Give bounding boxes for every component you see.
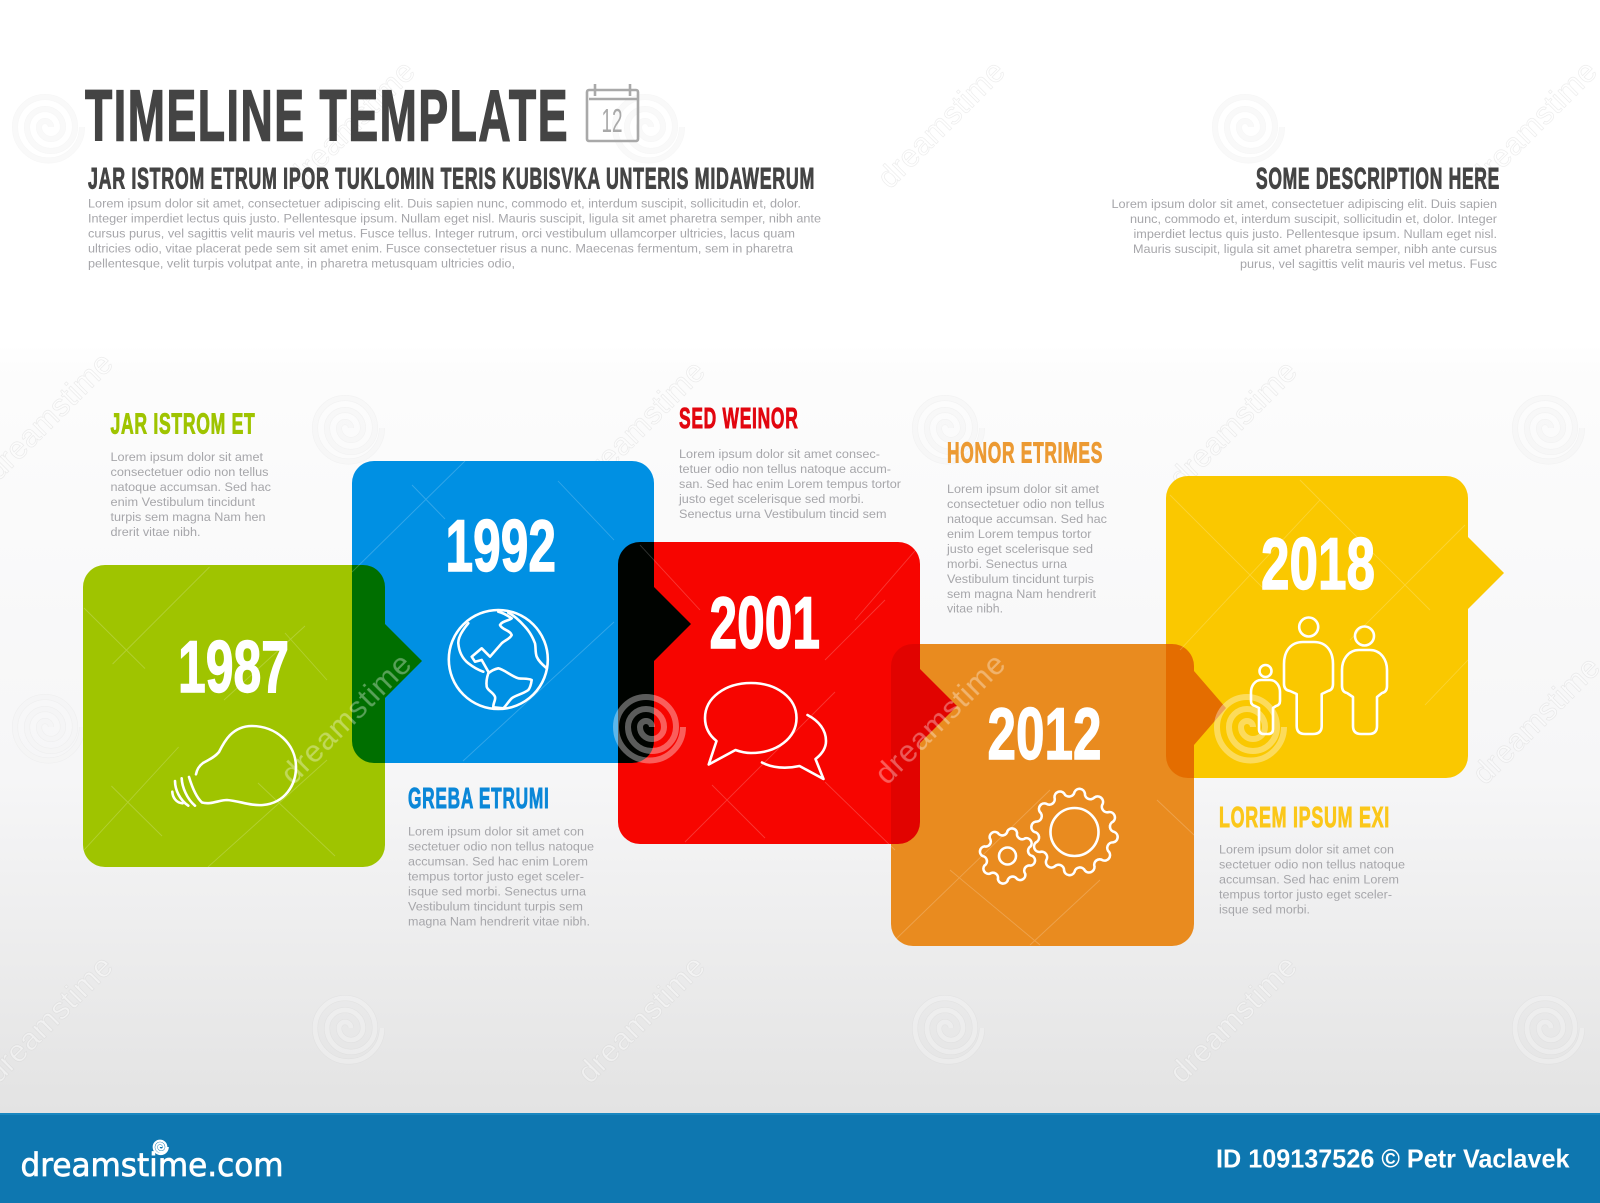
icon: calendar [587,84,638,141]
icon: calendar: 12 [602,102,622,139]
card: 1987 green [83,565,422,867]
icon: family [1251,618,1387,734]
body text: tempus tortor justo eget sceler- [1219,888,1392,902]
section: Sed Weinor [678,403,901,521]
body text: enim Lorem tempus tortor [947,527,1092,541]
heading: LOREM IPSUM EXI [1219,802,1390,834]
year: 1992: 1992 [446,506,556,587]
body text: Lorem ipsum dolor sit amet consec- [679,447,880,461]
body text: justo eget scelerisque sed [946,542,1093,556]
body text: isque sed morbi. Senectus urna [408,884,586,898]
body text: Senectus urna Vestibulum tincid sem [679,507,886,521]
heading: GREBA ETRUMI [408,783,550,815]
body text: sectetuer odio non tellus natoque [1219,858,1405,872]
body text: turpis sem magna Nam hen [110,510,266,524]
background watermark: dreamstime [570,949,712,1090]
section: Lorem Ipsum Exi [1219,802,1405,916]
body text: accumsan. Sed hac enim Lorem [408,854,588,868]
body text [946,482,1107,616]
heading: intro subtitle: JAR ISTROM ETRUM IPOR TUKLOMIN TERIS KUBISVKA UNTERIS MIDAWERUM [88,162,815,196]
section: Greba Etrumi [408,783,594,928]
body text: natoque accumsan. Sed hac [110,480,271,494]
heading: SED WEINOR [679,403,798,435]
body text: natoque accumsan. Sed hac [947,512,1107,526]
text block: description body: Mauris suscipit, ligula sit amet pharetra semper, nibh ante cursus [1133,242,1497,256]
footer bar [0,1113,1600,1203]
icon: light bulb [172,726,296,806]
watermark over cards [84,461,1468,945]
text block: description body [1112,197,1497,271]
text block: intro body [88,196,821,270]
text block: intro body: pellentesque, velit turpis volutpat ante, in pharetra metusquam ultricies odio, [88,256,515,270]
icon: gears [980,789,1118,884]
background watermark: dreamstime [1162,354,1304,495]
body text: Lorem ipsum dolor sit amet con [408,824,584,838]
body text: morbi. Senectus urna [947,557,1067,571]
background watermark: dreamstime [280,54,422,195]
text block: description body: nunc, commodo et, interdum suscipit, sollicitudin et, dolor. Integer [1130,212,1497,226]
section: Jar Istrom Et [110,408,271,539]
body text [408,824,594,928]
year: 1987: 1987 [178,627,289,708]
heading: HONOR ETRIMES [947,438,1103,470]
title: TIMELINE TEMPLATE [85,76,569,156]
body text: Vestibulum tincidunt turpis sem [408,900,583,914]
body text: magna Nam hendrerit vitae nibh. [408,914,590,928]
text block: intro body: ultricies odio, vitae placerat pede sem sit amet enim. Fusce consectetuer risus a nunc. Maecenas fermentum, sem in pharetra [88,242,793,256]
text block: intro body: Lorem ipsum dolor sit amet, consectetuer adipiscing elit. Duis sapien nunc, commodo et, interdum suscipit, sollicitudin et, dolor. [88,196,801,210]
body text: vitae nibh. [947,602,1003,616]
body text: justo eget scelerisque sed morbi. [678,492,864,506]
body text: Lorem ipsum dolor sit amet [947,482,1100,496]
background watermark: dreamstime [1162,949,1304,1090]
body text: Lorem ipsum dolor sit amet [110,450,264,464]
body text: consectetuer odio non tellus [947,497,1104,511]
card: 2012 orange [891,644,1226,946]
year: 2001: 2001 [710,583,820,664]
card: 2018 yellow [1166,476,1504,778]
text block: description body: purus, vel sagittis velit mauris vel metus. Fusc [1240,257,1497,271]
timeline cards [83,461,1504,946]
body text: sem magna Nam hendrerit [947,587,1097,601]
icon: speech bubbles [705,683,826,779]
card: 1992 blue [352,461,691,763]
background watermark: dreamstime [870,54,1012,195]
body text: accumsan. Sed hac enim Lorem [1219,872,1399,886]
body text [110,450,271,539]
text block: intro body: cursus purus, vel sagittis velit mauris vel metus. Fusce tellus. Integer rutrum, orci vestibulum ullamcorper ultricies, lacus quam [88,226,795,240]
watermark over cards: dreamstime [867,646,1012,791]
body text: drerit vitae nibh. [110,525,200,539]
card: 2001 red [618,542,957,844]
body text: consectetuer odio non tellus [110,465,268,479]
body text: Lorem ipsum dolor sit amet con [1219,842,1394,856]
year: 2018: 2018 [1261,524,1375,605]
body text [678,447,901,521]
heading: JAR ISTROM ET [110,408,256,440]
section: Honor Etrimes [946,438,1107,616]
body text: enim Vestibulum tincidunt [110,495,256,509]
background watermark: dreamstime [1462,54,1600,195]
body text: tempus tortor justo eget sceler- [408,870,584,884]
body text: isque sed morbi. [1219,902,1310,916]
text block: intro body: Integer imperdiet lectus quis justo. Pellentesque ipsum. Nullam eget nisl. Mauris suscipit, ligula sit amet pharetra semper, nibh ante [88,212,821,226]
body text [1219,842,1405,916]
body text: tetuer odio non tellus natoque accum- [679,462,891,476]
body text: sectetuer odio non tellus natoque [408,840,594,854]
text block: description body: imperdiet lectus quis justo. Pellentesque ipsum. Nullam eget nisl. [1134,227,1497,241]
body text: Vestibulum tincidunt turpis [947,572,1094,586]
footer logo: dreamstime.com [20,1146,284,1184]
footer credit: ID 109137526 © Petr Vaclavek [1216,1144,1570,1174]
body text: san. Sed hac enim Lorem tempus tortor [679,477,901,491]
text block: description body: Lorem ipsum dolor sit amet, consectetuer adipiscing elit. Duis sapien [1112,197,1497,211]
watermark over cards: dreamstime [273,646,418,791]
background watermark: dreamstime [570,354,712,495]
year: 2012: 2012 [988,694,1102,775]
icon: globe [449,610,548,709]
